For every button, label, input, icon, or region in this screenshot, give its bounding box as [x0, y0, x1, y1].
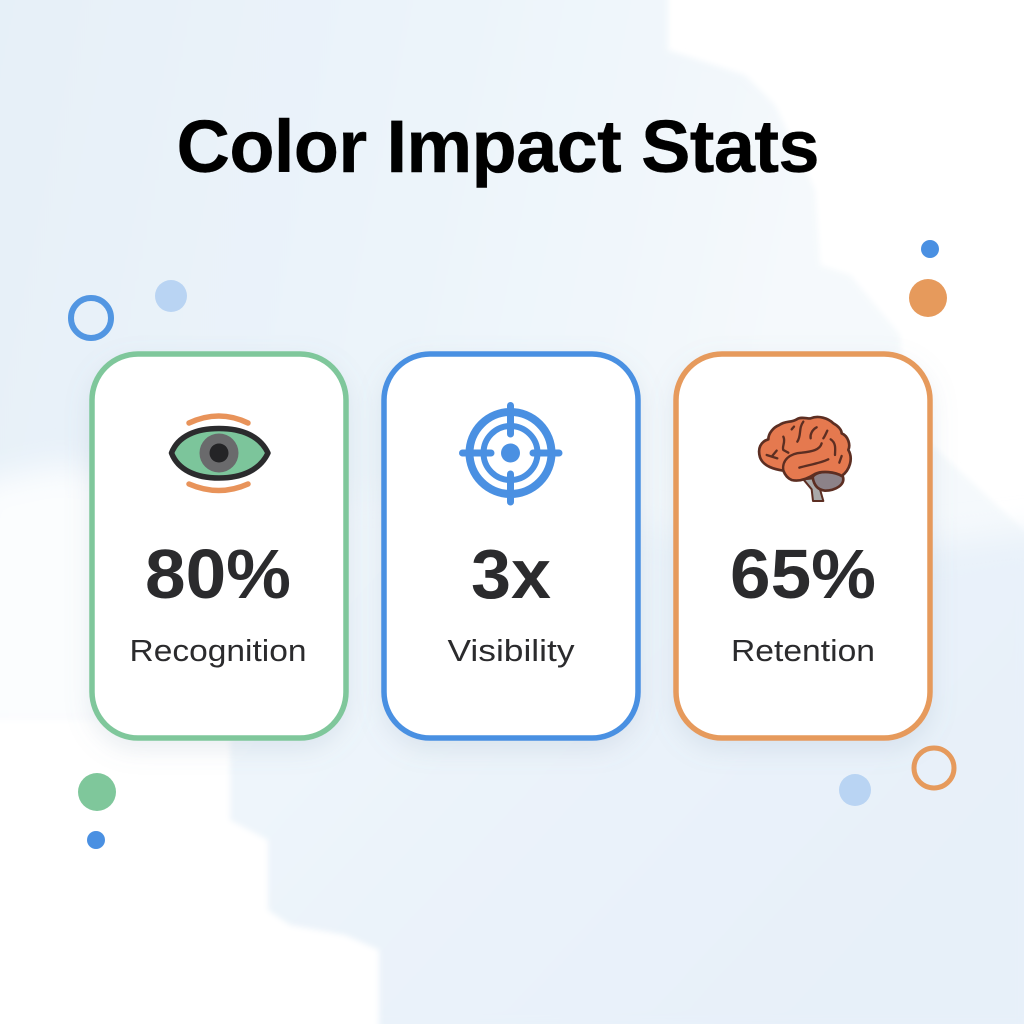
label: recognition: Recognition	[130, 633, 306, 668]
decorative circle: light blue bottom right	[839, 774, 871, 806]
decorative circle: small blue bottom left	[87, 831, 105, 849]
decorative circle: orange top right	[909, 279, 947, 317]
stat: 3x: 3x	[471, 535, 551, 613]
card: visibility	[384, 354, 638, 738]
label: visibility: Visibility	[448, 633, 575, 668]
panel: retention	[676, 354, 930, 738]
decorative circle: small blue top right	[921, 240, 939, 258]
panel: recognition	[92, 354, 346, 738]
decorative circle: blue ring top left	[71, 298, 111, 338]
card: retention	[676, 354, 930, 738]
decorative circle: green bottom left	[78, 773, 116, 811]
decorative circle: orange ring bottom right	[914, 748, 954, 788]
stat: 65%: 65%	[730, 535, 876, 613]
icon: brain	[759, 417, 851, 501]
stat: 80%: 80%	[145, 535, 291, 613]
label: retention: Retention	[731, 633, 875, 668]
icon: eye	[172, 416, 268, 490]
icon: target	[462, 406, 559, 502]
decorative circle: light blue top left	[155, 280, 187, 312]
title: Color Impact Stats	[176, 105, 820, 188]
panel: visibility	[384, 354, 638, 738]
card: recognition	[92, 354, 346, 738]
